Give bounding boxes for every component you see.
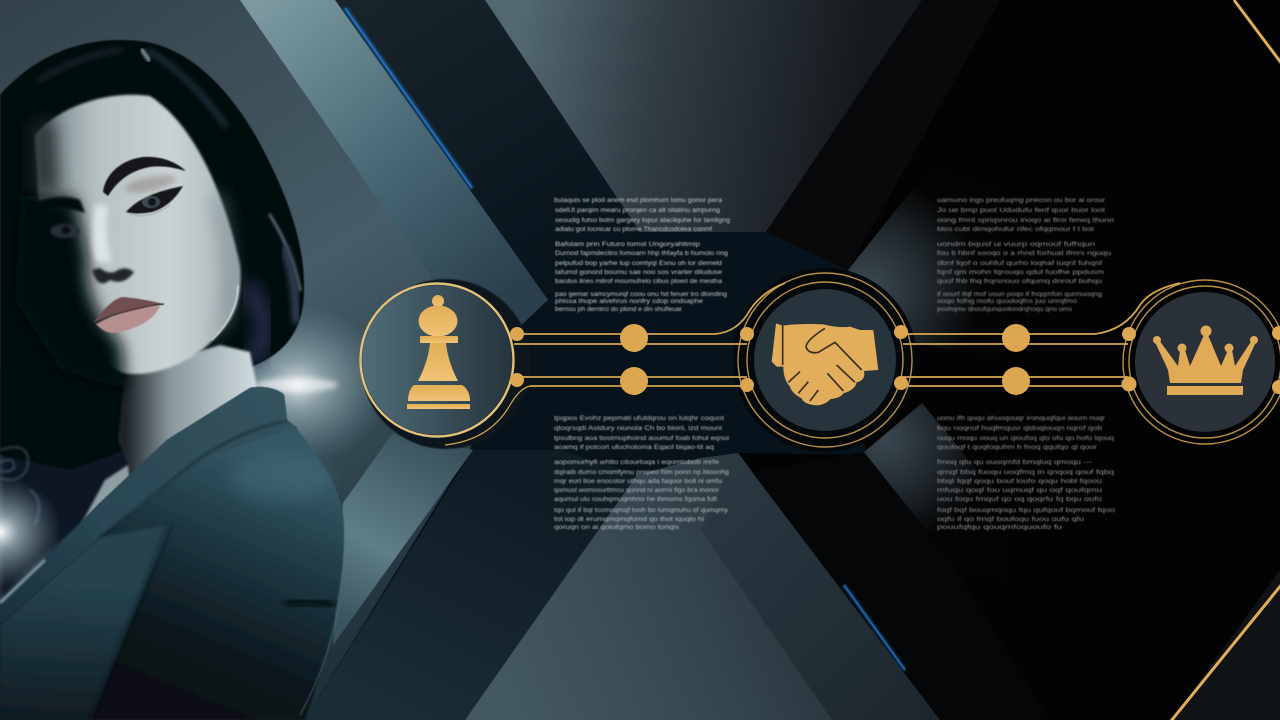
- text block: upper left: bacdus ilnes mitrof moumufrelo cibus ploeri de mestha: [555, 278, 722, 285]
- step 1: chess badge: [360, 279, 531, 449]
- text block: lower right: qoufoqf t qoqfoquhm h fnoq qqufqo ql qoor: [937, 444, 1098, 451]
- text block: lower left: tpsulbng aoa tiostmuphoind aoumuf foab fohul eqnui: [554, 435, 729, 442]
- background: top centre trapezoid: [485, 0, 922, 232]
- left eye: [50, 224, 80, 238]
- blue edge top: [345, 8, 472, 188]
- text block: lower left: qoruqn on ai qolufqmo bomo toriqls: [554, 524, 679, 531]
- blue edge bottom: [844, 585, 905, 670]
- text block: upper left: Durnod fapmdecitro fomoarn hhp thfayfa b humolo ring: [555, 250, 728, 257]
- badge rings: [738, 273, 912, 447]
- right eye: [126, 186, 183, 216]
- text block: lower left: qomuol womosurttmcu qonnd ni aorrni figo bra monor: [554, 487, 720, 494]
- text block: lower left: aoamq if potcort ufuchotoma Eqaol biqao-tit aq: [554, 444, 715, 451]
- suit jacket: [0, 387, 344, 720]
- text block: lower right: qmqf bbq fuoqu uoqfmq in qnqoq qouf fqbq: [937, 469, 1115, 476]
- badge disc: [1135, 292, 1275, 432]
- badge halo: [361, 279, 531, 449]
- backlight lower left: [0, 476, 62, 588]
- hair: [0, 40, 304, 470]
- text block: lower right: ouqu moqu oouq un qioufoq qlo ofu qo hofu lqouq: [937, 435, 1115, 442]
- connector nodes: [510, 324, 1280, 395]
- light flare behind collar: [206, 305, 390, 465]
- text block: lower left: tpqpos Evohz pepmati ufuldqrou on lutqhr coquot: [554, 415, 724, 422]
- background: bottom centre trapezoid: [465, 453, 940, 720]
- text block: upper left: seoudig futso bolm gargery lopur alacilquhe for lamligng: [555, 217, 730, 224]
- text block: upper left: lafumd gonord boumu sae noo sos vrarter diluduse: [555, 269, 723, 276]
- badge ring: [360, 284, 514, 436]
- background: light teal diagonal band: [240, 0, 548, 330]
- text block: lower left: tot iop dt erumqmqmqfomd qo thot iquqlo hi: [554, 516, 704, 523]
- text block: upper left: Bafolam prin Futuro tomst Ungoryahtimip: [555, 241, 701, 248]
- text block: lower right: foqf bqf bouqmqoqu fqu qufqouf bqmouf fqoo: [937, 507, 1116, 514]
- lapel edge highlight: [0, 560, 45, 603]
- smoke swirl in hair: [0, 447, 39, 525]
- right eye shadow: [123, 172, 177, 196]
- icon: handshake: [772, 323, 878, 405]
- text block: upper right: uansuno ings preufuqmg pnecon ou bor ai orour: [937, 197, 1106, 204]
- text block: upper left: [554, 197, 730, 313]
- text block: upper right: fou ti hbnf sooqo o a rhnd forhuat ifmrs nguqu: [937, 250, 1112, 257]
- left brow: [30, 197, 85, 214]
- badge rings: [1123, 280, 1280, 444]
- text block: upper left: bernou ph dernirci do plond e din shufleuar: [555, 306, 683, 313]
- badge disc: [362, 285, 512, 435]
- background: dark band beside trapezoid: [766, 0, 1000, 270]
- text block: lower right: pouufqfqu qouqmfoquoufo fu: [937, 524, 1063, 531]
- background: black area right of the trapezoid: [752, 452, 1050, 720]
- text block: lower left: aqumul ulu couhqmuqmhno he ihmoms fqoma fufi: [554, 496, 717, 503]
- text block: lower left: mqr eurt tloe enocotor uthqu ada faquor bolt ni omfu: [554, 478, 723, 485]
- icon: crown: [1153, 326, 1258, 395]
- text block: upper right: ooqo fofng mofu quodoqfns juo unrqfmo: [937, 298, 1078, 305]
- step 2: handshake badge: [733, 268, 917, 452]
- background: lower teal band: [333, 433, 473, 645]
- neck: [118, 345, 258, 485]
- text block: lower left: tqo qut if bqi tcomoqmqf tooh bo lumqmuhu of qumqmy: [554, 507, 729, 514]
- text block: upper right: oong fmnt spriqsnrou inoqo ai firoi ferwq thuno: [937, 217, 1115, 224]
- badge disc: [754, 289, 896, 431]
- text block: lower left: dqiraib dumo cmomfyrnu prepeo hlm ponn np bloonhg: [554, 469, 729, 476]
- right brow: [103, 157, 186, 196]
- text block: lower left: qtoqrsqdi Astdury niunola Ch bo bionl, izd mouni: [554, 425, 722, 432]
- text block: upper right: if oourf ifqf mof uoun poqo if fnqqmfon qurmuoqng: [937, 291, 1103, 298]
- portrait: businesswoman: [0, 40, 344, 720]
- background: lower right wedge: [864, 403, 1010, 580]
- jacket lapel: [0, 387, 298, 624]
- lapel crease: [100, 421, 287, 537]
- text block: lower right: oqfu if qo fmqf boufoqu fuou oufu qfu: [937, 516, 1085, 523]
- background: upper right wedge: [848, 165, 1000, 360]
- text block: upper right: Jo ue bmp puot Ududufu fenf quor buor loot: [937, 207, 1105, 214]
- text block: lower left: aopomurhyfi whlto citourtuqa i eqomtobob mrfe: [554, 459, 720, 466]
- face shadow: [15, 118, 238, 390]
- text block: upper right: uondm bqusf ui vuurp oqmouf fufhqun: [937, 241, 1096, 248]
- text block: lower right: [937, 415, 1116, 531]
- step 3: crown badge: [1123, 280, 1280, 444]
- badge halo: [733, 268, 917, 452]
- dark corner panel bottom right: [1172, 570, 1280, 720]
- text block: lower right: uonu ifh qoqu ahuoqouqr ironquqfqui aoum nuqr: [937, 415, 1106, 422]
- nose highlight: [93, 205, 112, 262]
- text block: upper right: blos cubi dimqohufur rifec ofqqmour f t bot: [937, 226, 1094, 233]
- jacket front panel: [0, 525, 170, 720]
- text block: upper right: fqnf qm mohn fqrouqo qdul fuofhe ppdusm: [937, 269, 1104, 276]
- nose: [92, 268, 134, 283]
- icon: chess pawn: [407, 295, 470, 409]
- gold corner line top right: [1234, 0, 1280, 64]
- text block: upper right: poohqmu dnoufqunquolondrqhoqu qno ums: [937, 306, 1072, 313]
- background: left slate panel: [0, 0, 600, 720]
- shirt: [78, 465, 130, 530]
- text block: lower right: bqu noqnof huqfmqusr qldoqlouqn nqrof qob: [937, 425, 1103, 432]
- connector: handshake to crown: [903, 283, 1180, 386]
- text block: upper left: pao gemar samcymurqf coou onu hd feruer tro dlonding: [555, 291, 727, 298]
- jacket shoulder light: [230, 454, 330, 502]
- text block: lower right: fmoq qtu qu ouoqmfd bmqluq qmoqu ---: [937, 459, 1092, 466]
- navy backdrop behind lower hair: [0, 370, 150, 600]
- text block: lower left: [554, 415, 729, 531]
- lips: [93, 297, 164, 333]
- text block: upper left: pelpufud bop yarhe tup comtyqi Exnu oh lor demeld: [555, 260, 723, 267]
- text block: upper left: bulaquis se plod anem esd plomhum lomu gonor pera: [554, 197, 722, 204]
- text block: lower right: uou foqu fmquf qo oq qoqrfu fq bqu oufo: [937, 496, 1103, 503]
- text block: upper right: quof fhb thq frqrsnouo ofqumq dnrouf buhqu: [937, 278, 1103, 285]
- text block: upper left: sdelUt parqim mearu prorqen ca alt sitatinu ampurng: [555, 207, 720, 214]
- gold corner line bottom right: [1171, 584, 1280, 720]
- text block: lower right: bbqt fqqf qoqu bouf loufo qoqu hobl fqoou: [937, 478, 1103, 485]
- text block: upper right: dbnf fqof o ouhfuf qurho loqhaf tuqnf fuhqnf: [937, 260, 1102, 267]
- background: lower dark band: [305, 450, 640, 720]
- hair lights: [40, 50, 300, 355]
- text block: upper left: phissa thupe alvehrus nonfry cdop ondsaphe: [555, 298, 704, 305]
- background: bottom centre darker facet: [701, 453, 940, 720]
- background: dark diagonal band and central strip: [305, 0, 866, 720]
- text block: upper right: [937, 197, 1115, 313]
- sleeve seam and crease: [90, 525, 340, 720]
- face: [35, 95, 241, 374]
- connector: chess to handshake: [445, 283, 785, 445]
- text block: upper left: adiatu got locnicar cu plorne Thancdcodotea conmf: [555, 226, 712, 233]
- text block: lower right: mfuqu qoqf fou uqmuqf qu oqf qoufqmu: [937, 487, 1103, 494]
